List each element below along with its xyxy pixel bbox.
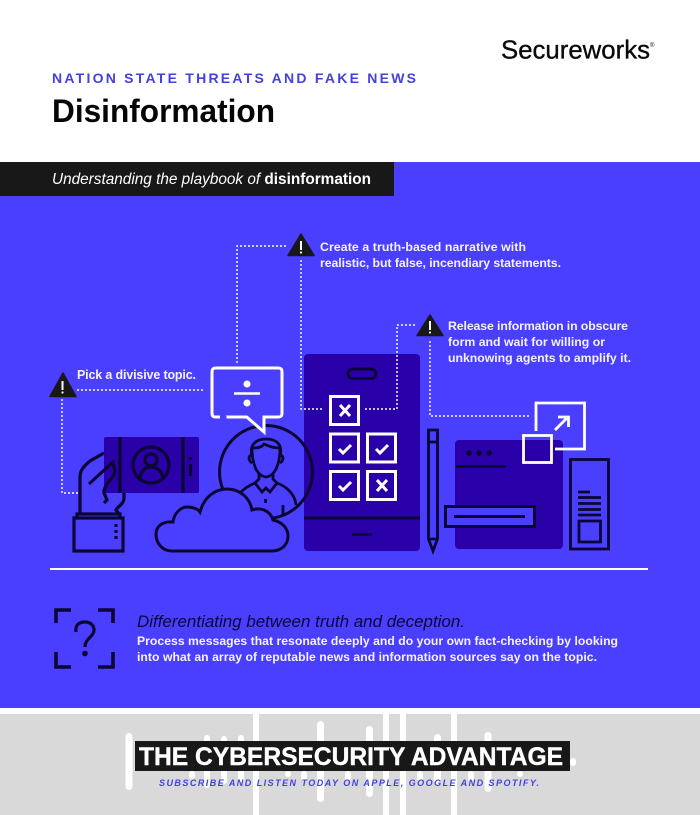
illustration: browser window [446, 440, 563, 549]
illustration: hand holding phone [74, 437, 199, 551]
text: truth-based narrative [320, 240, 561, 270]
logo: Secureworks: Secureworks [501, 34, 650, 64]
heading: differentiating: Differentiating between truth and deception. [137, 613, 465, 631]
logo: Secureworks: ® [650, 42, 655, 49]
icon: speech bubble with divide sign [212, 368, 282, 432]
text: fact checking advice: Process messages that resonate deeply and do your own fact-checking by looking [137, 634, 618, 648]
icon: expand arrow squares [524, 403, 584, 462]
divider [50, 568, 648, 570]
illustration: person in circle behind cloud [156, 426, 312, 551]
panel: blue playbook background [0, 162, 700, 708]
text: release information: form and wait for willing or [448, 335, 605, 349]
text: release information: Release information in obscure [448, 319, 628, 333]
illustration: document [570, 460, 608, 549]
section banner: Understanding the playbook of disinformation [52, 171, 371, 188]
text: release information [448, 319, 631, 365]
subscribe line: SUBSCRIBE AND LISTEN TODAY ON APPLE, GOOGLE AND SPOTIFY. [159, 778, 539, 788]
text: release information: unknowing agents to amplify it. [448, 351, 631, 365]
footer panel [0, 714, 700, 815]
dotted connector lines [62, 246, 531, 493]
section banner [0, 162, 394, 196]
text: fact checking advice [137, 634, 618, 664]
title: Disinformation [52, 93, 275, 129]
text: truth-based narrative: Create a truth-based narrative with [320, 240, 526, 254]
icon: warning triangle pick topic [50, 373, 76, 396]
icon: question mark in focus brackets [56, 610, 113, 667]
text: truth-based narrative: realistic, but false, incendiary statements. [320, 256, 561, 270]
podcast title: THE CYBERSECURITY ADVANTAGE [139, 743, 563, 771]
text: fact checking advice: into what an array of reputable news and information sources say on the topic. [137, 650, 597, 664]
icon: warning triangle narrative [288, 234, 314, 256]
illustration: pencil [428, 430, 438, 551]
illustration: phone with checklist [304, 354, 420, 551]
eyebrow heading: NATION STATE THREATS AND FAKE NEWS [52, 70, 416, 86]
icon: warning triangle release [417, 315, 443, 336]
text: pick a divisive topic: Pick a divisive topic. [77, 368, 196, 382]
